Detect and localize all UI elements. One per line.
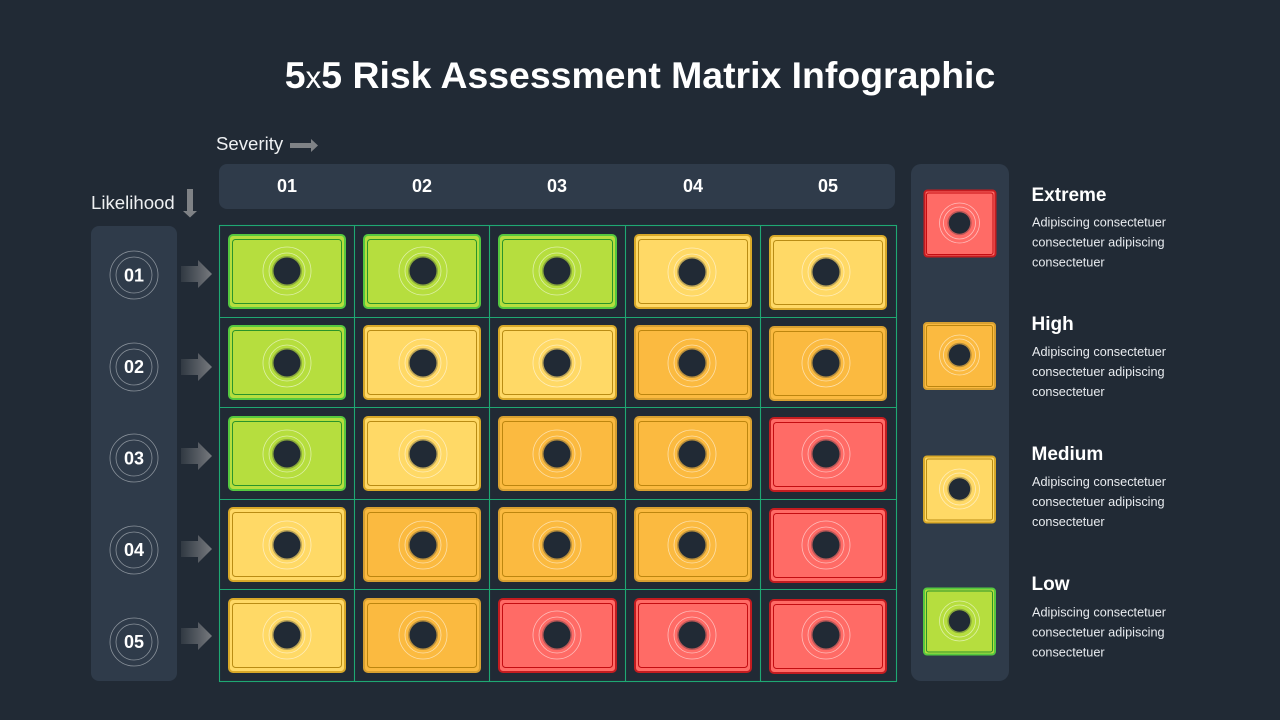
legend panel: [911, 164, 1009, 681]
legend text: medium: consectetuer adipiscing: [1032, 495, 1165, 509]
legend swatch: extreme: [924, 190, 996, 256]
severity header panel: 03: [547, 176, 567, 196]
legend text: low: consectetuer: [1032, 646, 1105, 660]
likelihood 03: [110, 434, 158, 482]
severity header panel: 01: [277, 176, 297, 196]
legend text: medium: [1032, 444, 1167, 529]
likelihood 02: 02: [124, 357, 144, 377]
arrow row 02: [181, 353, 212, 381]
arrow row 04: [181, 535, 212, 563]
severity label: Severity: [216, 133, 284, 154]
matrix grid: [219, 225, 897, 682]
likelihood label: Likelihood: [91, 192, 175, 213]
title: 5x5 Risk Assessment Matrix Infographic: [285, 54, 995, 96]
severity header panel: 02: [412, 176, 432, 196]
cell 4-1: [229, 508, 345, 581]
cell 2-5: [770, 327, 886, 400]
cell 3-1: [229, 417, 345, 490]
legend text: extreme: Extreme: [1032, 185, 1106, 206]
cell 1-2: [364, 235, 480, 308]
arrow row 05: [181, 622, 212, 650]
cell 2-1: [229, 326, 345, 399]
cell 1-1: [229, 235, 345, 308]
cell 3-5: [770, 418, 886, 491]
cell 5-2: [364, 599, 480, 672]
likelihood panel: [91, 226, 177, 681]
cell 2-2: [364, 326, 480, 399]
severity header panel: 04: [683, 176, 703, 196]
legend text: extreme: Adipiscing consectetuer: [1032, 216, 1167, 230]
arrow row 03: [181, 442, 212, 470]
severity label: [216, 133, 318, 154]
severity header panel: [219, 164, 895, 209]
cell 1-3: [499, 235, 616, 308]
cell 3-3: [499, 417, 616, 490]
cell 5-4: [635, 599, 751, 672]
legend text: high: consectetuer: [1032, 385, 1105, 399]
legend text: medium: consectetuer: [1032, 515, 1105, 529]
cell 5-5: [770, 600, 886, 673]
cell 4-2: [364, 508, 480, 581]
legend text: low: [1032, 574, 1167, 660]
likelihood 04: 04: [124, 540, 144, 560]
likelihood 05: [110, 618, 158, 666]
arrow row 01: [181, 260, 212, 288]
legend text: medium: Medium: [1032, 444, 1103, 465]
likelihood 02: [110, 343, 158, 391]
legend swatch: medium: [924, 456, 995, 522]
likelihood 03: 03: [124, 448, 144, 468]
likelihood 01: [110, 251, 158, 299]
cell 1-5: [770, 236, 886, 309]
legend text: high: consectetuer adipiscing: [1032, 365, 1165, 379]
legend swatch: low: [924, 588, 995, 654]
cell 5-3: [499, 599, 616, 672]
legend text: medium: Adipiscing consectetuer: [1032, 475, 1167, 489]
cell 3-2: [364, 417, 480, 490]
cell 4-4: [635, 508, 751, 581]
cell 2-3: [499, 326, 616, 399]
legend text: low: Low: [1032, 574, 1070, 595]
cell 2-4: [635, 326, 751, 399]
legend text: extreme: consectetuer adipiscing: [1032, 236, 1165, 250]
likelihood 01: 01: [124, 266, 144, 286]
legend text: extreme: consectetuer: [1032, 256, 1105, 270]
legend text: low: Adipiscing consectetuer: [1032, 606, 1167, 620]
legend text: low: consectetuer adipiscing: [1032, 626, 1165, 640]
legend text: extreme: [1032, 185, 1167, 270]
legend text: high: [1032, 314, 1167, 399]
cell 4-3: [499, 508, 616, 581]
likelihood 05: 05: [124, 632, 144, 652]
legend swatch: high: [924, 323, 995, 389]
cell 5-1: [229, 599, 345, 672]
severity header panel: 05: [818, 176, 838, 196]
legend text: high: High: [1032, 314, 1074, 335]
cell 4-5: [770, 509, 886, 582]
cell 1-4: [635, 235, 751, 308]
likelihood 04: [110, 526, 158, 574]
legend text: high: Adipiscing consectetuer: [1032, 345, 1167, 359]
likelihood label: [91, 189, 197, 218]
cell 3-4: [635, 417, 751, 490]
